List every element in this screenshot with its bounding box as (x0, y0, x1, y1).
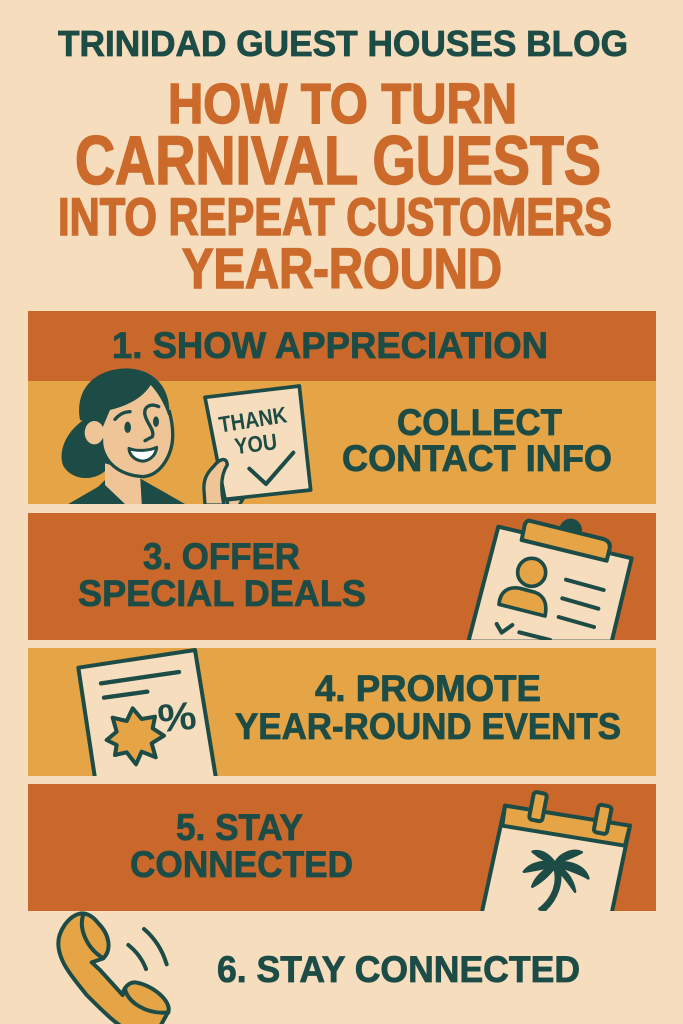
text: step 4: 4. PROMOTE (315, 668, 541, 709)
text: step 3 (78, 536, 366, 614)
blog name heading: TRINIDAD GUEST HOUSES BLOG (58, 23, 628, 64)
text: step 5: 5. STAY (176, 807, 303, 848)
text: step 4 (235, 668, 621, 747)
heading: step 1: 1. SHOW APPRECIATION (112, 325, 548, 366)
icon: calendar with palm tree (482, 792, 630, 913)
panel: collect contact info (28, 381, 656, 504)
panel: step 3 offer special deals (28, 513, 656, 640)
text: step 5 (130, 807, 353, 885)
text: step 3: SPECIAL DEALS (78, 573, 366, 614)
icon: clipboard with contact card (468, 519, 632, 642)
icon: discount flyer: % (156, 694, 198, 741)
icon: woman holding thank you card (62, 368, 311, 507)
panel: step 1 show appreciation (28, 311, 656, 381)
text: collect contact info: COLLECT (397, 402, 562, 443)
panel: step 5 stay connected (28, 784, 656, 911)
main title (58, 72, 612, 301)
text: collect contact info: CONTACT INFO (342, 438, 612, 479)
heading: step 6 stay connected: 6. STAY CONNECTED (217, 949, 580, 990)
text: step 4: YEAR-ROUND EVENTS (235, 706, 621, 747)
panel: step 4 promote year-round events (28, 648, 656, 776)
main title: HOW TO TURN (168, 72, 517, 136)
main title: YEAR-ROUND (182, 237, 502, 301)
text: collect contact info (342, 402, 612, 479)
text: step 5: CONNECTED (130, 844, 353, 885)
icon: woman holding thank you card: THANK (217, 401, 289, 438)
text: step 3: 3. OFFER (143, 536, 300, 577)
icon: telephone handset (58, 913, 169, 1024)
icon: woman holding thank you card: YOU (233, 428, 278, 459)
icon: discount flyer (78, 650, 216, 778)
